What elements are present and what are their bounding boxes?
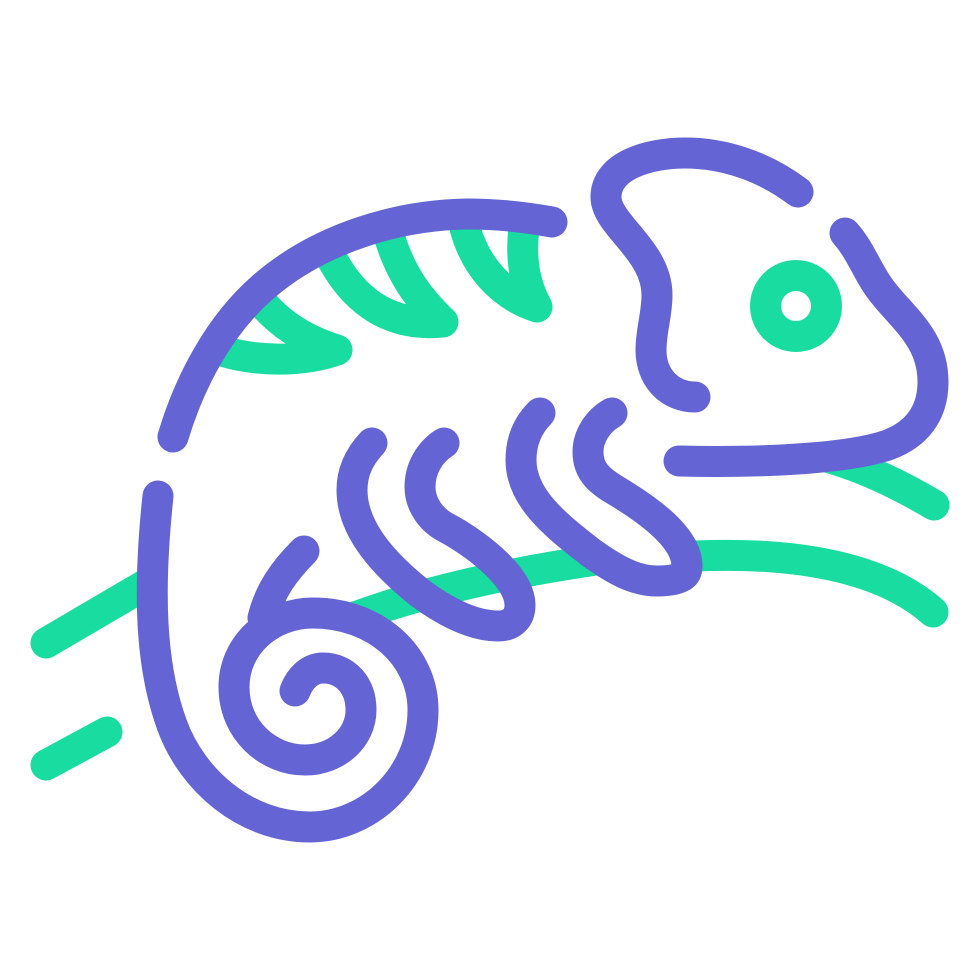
tail outer and spiral [152, 496, 423, 827]
back stripe 2 [330, 232, 443, 323]
back stripe 3 [465, 228, 537, 307]
branch right [695, 555, 933, 612]
icon: purple body outline [152, 153, 933, 827]
branch left lower [46, 732, 107, 765]
branch middle [352, 560, 596, 618]
rear leg [352, 443, 520, 626]
tail inner stem [263, 551, 304, 618]
branch left upper [46, 582, 150, 643]
back [173, 214, 552, 437]
head crest [606, 153, 798, 397]
branch behind head [830, 458, 934, 505]
eye [766, 276, 826, 336]
front leg [521, 413, 687, 581]
back stripe 1 [222, 298, 337, 359]
icon: green branch and stripes [46, 228, 934, 765]
snout and jaw [679, 233, 933, 461]
